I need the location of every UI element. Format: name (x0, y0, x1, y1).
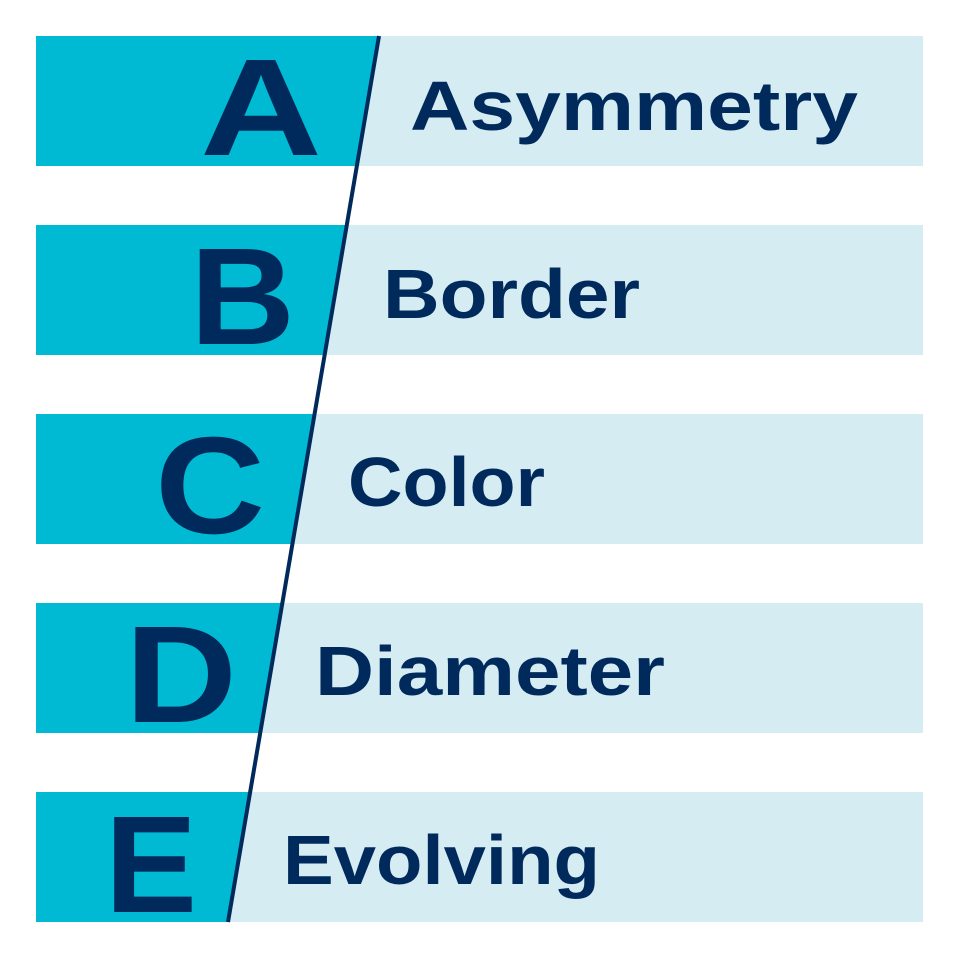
row E (36, 788, 923, 942)
letter C: C (155, 409, 265, 563)
row C (36, 409, 923, 563)
letter B: B (190, 220, 295, 374)
label Border: Border (383, 255, 640, 333)
label Asymmetry: Asymmetry (410, 67, 858, 145)
letter E: E (105, 788, 197, 942)
letter A: A (200, 31, 322, 185)
letter D: D (125, 598, 237, 752)
row A (36, 31, 923, 185)
row D (36, 598, 923, 752)
label Color: Color (348, 443, 545, 521)
row B (36, 220, 923, 374)
label Diameter: Diameter (315, 632, 665, 710)
diagonal divider line (228, 36, 379, 922)
label Evolving: Evolving (283, 821, 600, 899)
